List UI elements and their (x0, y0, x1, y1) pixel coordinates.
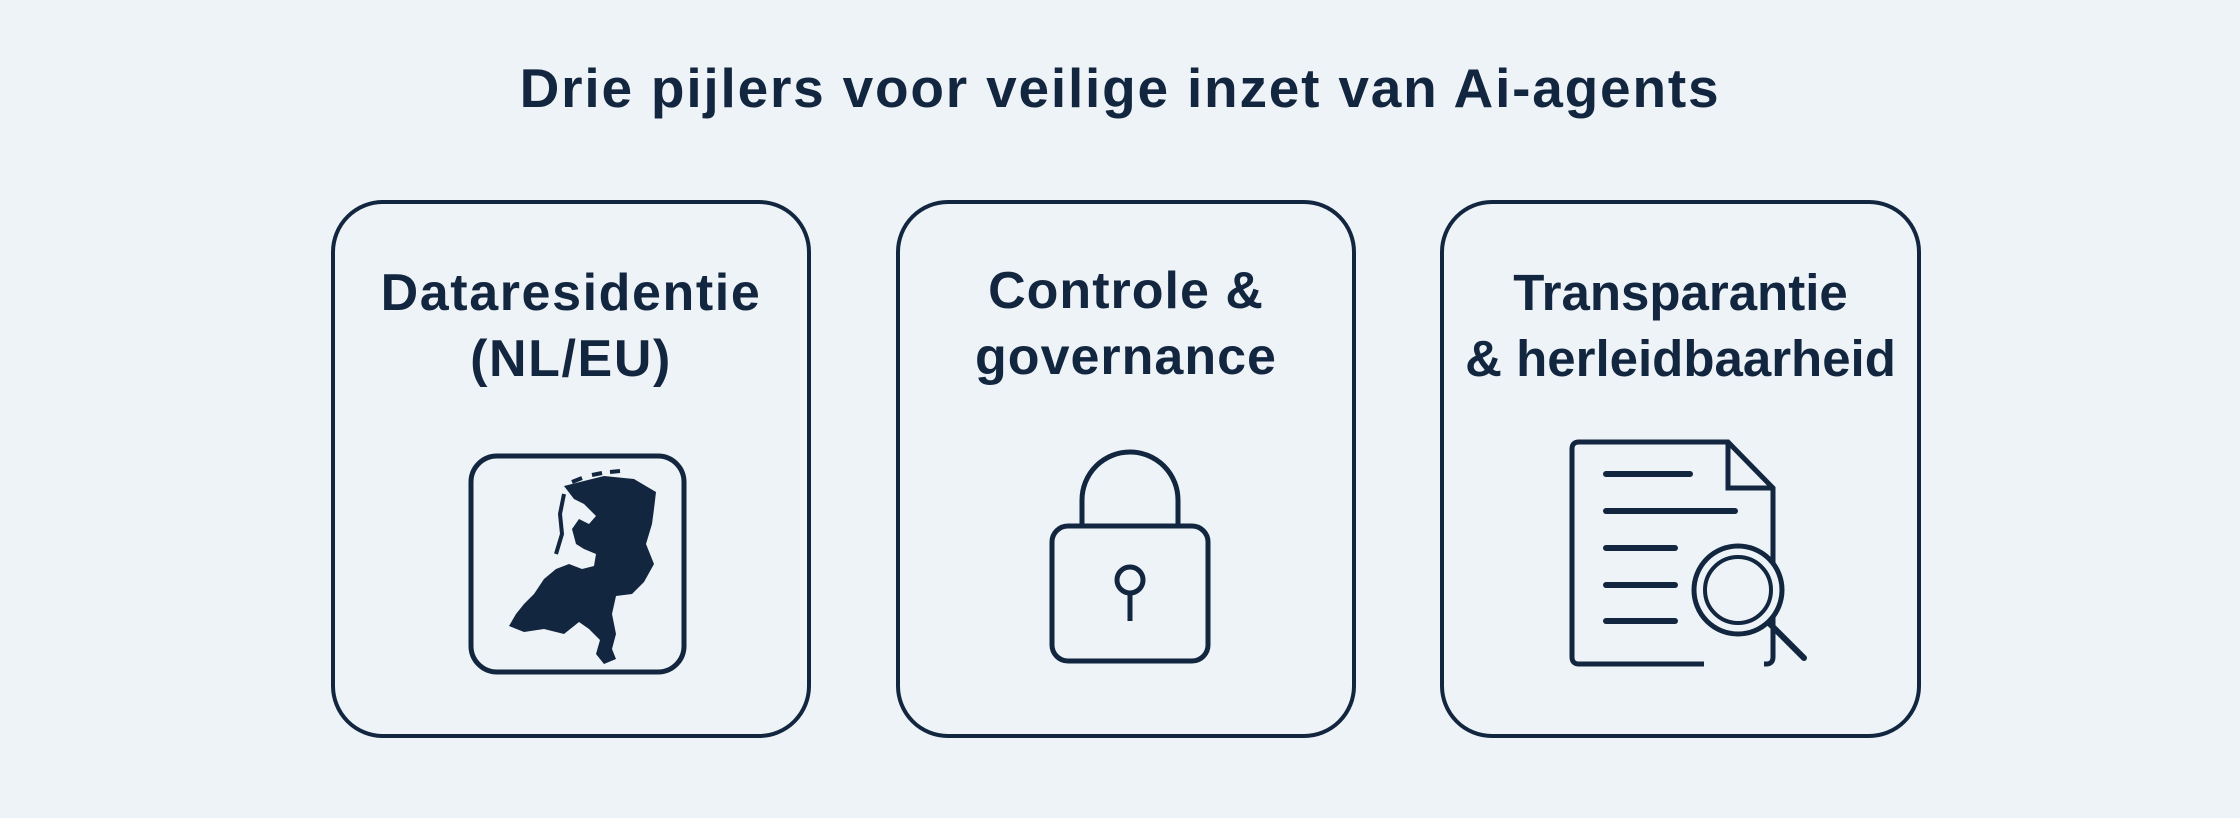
icon: padlock (1050, 450, 1210, 664)
panel: dataresidentie (331, 200, 811, 738)
icon: netherlands map (468, 454, 686, 674)
heading: transparantie: Transparantie (1513, 264, 1848, 321)
heading: dataresidentie (381, 264, 761, 388)
heading: dataresidentie: (NL/EU) (470, 330, 672, 388)
heading: controle: governance (975, 328, 1277, 386)
heading: dataresidentie: Dataresidentie (381, 264, 761, 322)
heading: transparantie (1465, 264, 1896, 387)
icon: document with magnifier (1570, 440, 1807, 666)
panel: transparantie (1440, 200, 1921, 738)
panel: controle & governance (896, 200, 1356, 738)
heading: controle (975, 262, 1277, 386)
title: Drie pijlers voor veilige inzet van Ai-agents (520, 57, 1720, 119)
heading: transparantie: & herleidbaarheid (1465, 330, 1896, 387)
heading: controle: Controle & (988, 262, 1264, 320)
